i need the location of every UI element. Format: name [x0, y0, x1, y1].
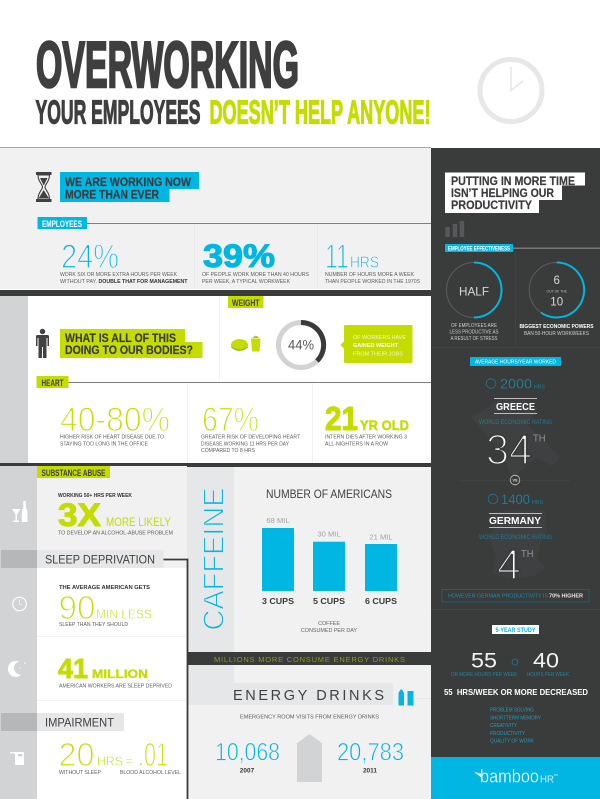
stat: germany: TH	[521, 548, 534, 560]
axis caption: CONSUMED PER DAY	[301, 628, 358, 634]
stat: 20 hrs = .01: HRS	[97, 753, 123, 768]
section tag: employees: EMPLOYEES	[42, 219, 82, 230]
bar chart: coffee cups	[262, 516, 397, 606]
stat: 55 vs 40	[451, 648, 569, 678]
stat: 3x more likely: MORE LIKELY	[106, 515, 171, 529]
icon: clock	[13, 597, 26, 611]
stat: 90 min less: THE AVERAGE AMERICAN GETS	[59, 585, 150, 591]
callout: gained weight: FROM THEIR JOBS	[353, 352, 403, 358]
panel: productivity sidebar	[431, 148, 600, 757]
icon: person	[36, 329, 49, 358]
panel: caffeine	[187, 466, 431, 653]
chart: 44% donut: 44%	[288, 336, 314, 352]
stat: 67%: GREATER RISK OF DEVELOPING HEART	[201, 434, 301, 440]
section tag: employee effectiveness: EMPLOYEE EFFECTIVENESS	[448, 246, 510, 252]
heading: DOING TO OUR BODIES?	[65, 343, 193, 357]
stat: 39%	[202, 238, 309, 285]
chart: 6 of 10 ring: 10	[550, 297, 563, 309]
section tag: substance abuse: SUBSTANCE ABUSE	[42, 468, 106, 479]
bar chart: coffee cups: 3 CUPS	[262, 596, 294, 606]
logo: bambooHR: bamboo	[480, 767, 539, 787]
icon: hourglass	[36, 172, 52, 202]
icon: burger and drink	[231, 336, 260, 352]
panel: energy drinks	[188, 665, 431, 799]
stat: germany: WORLD ECONOMIC RATING	[479, 535, 552, 541]
stat: 55 vs 40: 55	[471, 648, 497, 672]
stat: 67%: 67%	[202, 401, 259, 439]
stat: 67%: DISEASE WORKING 11 HRS PER DAY	[201, 441, 289, 447]
text: economic powers	[520, 324, 594, 337]
logo: bambooHR: HR	[540, 774, 554, 786]
stat: 90 min less	[58, 585, 152, 628]
bar chart: coffee cups: 21 MIL	[369, 533, 393, 542]
subtitle: YOUR EMPLOYEES	[36, 93, 200, 130]
connector line	[164, 560, 188, 799]
stat: 2011: 20,783	[337, 738, 404, 766]
bar chart: coffee cups: 5 CUPS	[313, 596, 345, 606]
heading	[445, 172, 585, 213]
icon: cans	[398, 690, 414, 706]
panel: substance abuse, sleep and impairment	[0, 466, 187, 799]
list: decreased skills: QUALITY OF WORK	[490, 739, 534, 745]
stat: 24%: DOUBLE THAT FOR MANAGEMENT	[98, 279, 188, 285]
icon: clock	[480, 60, 542, 122]
stat: greece: TH	[533, 433, 546, 444]
icon: versus	[510, 475, 520, 485]
section tag: heart: HEART	[42, 378, 64, 389]
stat: germany: 1400	[501, 492, 530, 507]
text: half of employees: LESS PRODUCTIVE AS	[450, 330, 499, 336]
stat: 39%: 39%	[203, 238, 275, 274]
stat: 2007: 10,068	[215, 738, 280, 766]
icon: moon and stars	[8, 661, 26, 677]
map: greece	[470, 398, 560, 478]
stat: 3x more likely: WORKING 50+ HRS PER WEEK	[58, 493, 132, 499]
heading	[60, 329, 202, 358]
stat: 67%: COMPARED TO 8 HRS	[201, 448, 255, 454]
icon: bars	[445, 221, 464, 237]
text: half of employees: A RESULT OF STRESS	[450, 336, 498, 342]
stat: 20 hrs = .01: WITHOUT SLEEP	[59, 770, 101, 776]
stat: 24%: WORK SIX OR MORE EXTRA HOURS PER WEEK	[60, 272, 177, 278]
axis caption: COFFEE	[318, 621, 340, 627]
stat: 2007: 2007	[240, 768, 255, 775]
stat: greece: HRS	[534, 384, 546, 390]
chart: 6 of 10 ring: OUT OF THE	[546, 290, 568, 294]
callout: german productivity: 70% HIGHER	[549, 594, 583, 600]
stat: germany: GERMANY	[489, 515, 541, 527]
list: decreased skills: CREATIVITY	[490, 723, 517, 729]
stat: 21 yr old: INTERN DIES AFTER WORKING 3	[325, 434, 407, 440]
axis caption	[301, 621, 358, 634]
heading: ISN’T HELPING OUR	[451, 186, 554, 200]
stat: 20 hrs = .01: 20	[58, 736, 94, 773]
caption: EMERGENCY ROOM VISITS FROM ENERGY DRINKS	[240, 715, 379, 721]
panel: logo footer	[431, 757, 600, 799]
heading: impairment	[1, 713, 124, 731]
stat: 20 hrs = .01: .01	[138, 736, 168, 773]
callout: gained weight: GAINED WEIGHT	[353, 343, 399, 349]
stat: 3x more likely: TO DEVELOP AN ALCOHOL-ABUSE PROBLEM	[58, 531, 173, 537]
text: half of employees: OF EMPLOYEES ARE	[451, 323, 498, 329]
stat: 39%: OF PEOPLE WORK MORE THAN 40 HOURS	[202, 272, 309, 278]
heading: MORE THAN EVER	[65, 188, 159, 202]
stat: 11 hrs: 11	[325, 238, 349, 276]
section tag: weight	[228, 296, 264, 309]
stat: germany: HRS	[532, 500, 544, 506]
section tag: 5-year study	[492, 625, 539, 634]
stat: 20 hrs = .01: =	[125, 753, 133, 768]
heading: sleep deprivation: SLEEP DEPRIVATION	[45, 553, 155, 567]
banner: millions more: MILLIONS MORE CONSUME ENERGY DRINKS	[214, 655, 405, 664]
heading: impairment: IMPAIRMENT	[45, 716, 115, 730]
stat: 90 min less: 90	[58, 589, 96, 626]
stat: greece: GREECE	[496, 401, 535, 413]
text: economic powers: BIGGEST ECONOMIC POWERS	[520, 324, 594, 330]
chart title: NUMBER OF AMERICANS	[266, 489, 392, 501]
stat: 20 hrs = .01: BLOOD ALCOHOL LEVEL	[120, 770, 181, 776]
stat: 67%	[201, 401, 301, 454]
heading: caffeine vertical: CAFFEINE	[198, 488, 230, 630]
section tag: employees	[38, 217, 431, 230]
stat: 11 hrs	[325, 238, 420, 285]
callout: german productivity	[442, 590, 589, 602]
stat: 24%: WITHOUT PAY.	[60, 279, 97, 285]
section tag: substance abuse	[37, 466, 110, 479]
callout: german productivity: HOWEVER GERMAN PRODUCTIVITY IS	[448, 594, 548, 600]
section tag: heart	[36, 376, 431, 389]
stat: 3x more likely	[58, 493, 173, 537]
chart: 6 of 10 ring: 6	[553, 275, 560, 287]
icon: bottle and glass	[12, 501, 28, 522]
section tag: average hours: AVERAGE HOURS/YEAR WORKED	[475, 360, 556, 366]
section tag: weight: WEIGHT	[232, 298, 260, 309]
chart: 44% donut	[278, 322, 324, 368]
text: half of employees	[450, 323, 499, 342]
stat: 41 million: MILLION	[92, 669, 148, 681]
arrow	[296, 734, 323, 782]
stat: greece: WORLD ECONOMIC RATING	[479, 420, 552, 426]
stat: 11 hrs: THAN PEOPLE WORKED IN THE 1970S	[325, 279, 420, 285]
stat: 55 vs 40: OR MORE HOURS PER WEEK	[451, 672, 517, 678]
callout: gained weight	[340, 325, 412, 363]
list: decreased skills: PROBLEM SOLVING	[490, 708, 534, 714]
title: OVERWORKING	[36, 28, 299, 101]
heading: ENERGY DRINKS	[233, 688, 384, 704]
stat: 3x more likely: 3X	[58, 497, 102, 533]
icon: breathalyzer	[10, 752, 24, 765]
logo: bambooHR: TM	[554, 774, 558, 777]
list: decreased skills	[490, 708, 541, 745]
stat: 41 million: 41	[58, 653, 88, 684]
stat: 21 yr old: 21	[325, 400, 358, 437]
heading: sleep deprivation	[1, 550, 164, 568]
heading: PUTTING IN MORE TIME	[451, 174, 575, 188]
chart: half ring: HALF	[459, 287, 489, 299]
stat: 2007	[215, 738, 280, 775]
stat: 55 vs 40: 40	[533, 648, 559, 672]
chart: half ring	[446, 262, 502, 318]
stat: 41 million: AMERICAN WORKERS ARE SLEEP DEPRIVED	[59, 684, 172, 690]
heading: WE ARE WORKING NOW	[65, 175, 191, 189]
icon: versus: VS	[512, 479, 518, 483]
panel: header	[0, 0, 600, 148]
banner: millions more	[187, 652, 431, 665]
stat: 39%: PER WEEK, A TYPICAL WORKWEEK	[202, 279, 290, 285]
section tag: average hours	[470, 357, 561, 366]
section tag: employee effectiveness	[445, 244, 600, 252]
stat: 20 hrs = .01	[58, 736, 181, 776]
panel: bodies	[0, 296, 431, 466]
heading: PRODUCTIVITY	[451, 198, 532, 212]
stat: 11 hrs: NUMBER OF HOURS MORE A WEEK	[325, 272, 414, 278]
callout: gained weight: OF WORKERS HAVE	[353, 335, 406, 341]
stat: 40-80%: STAYING TOO LONG IN THE OFFICE	[60, 441, 148, 447]
bar chart: coffee cups: 68 MIL	[266, 516, 290, 525]
bar chart: coffee cups: 30 MIL	[317, 530, 341, 539]
stat: 24%	[60, 238, 188, 285]
bar chart: coffee cups: 6 CUPS	[365, 596, 397, 606]
map: germany	[490, 510, 547, 578]
stat: 41 million	[58, 653, 172, 690]
stat: 21 yr old	[325, 400, 409, 447]
stat: greece: 2000	[500, 376, 532, 391]
text: economic powers: BAN 50-HOUR WORKWEEKS	[524, 331, 590, 337]
list: decreased skills: SHORTTERM MEMORY	[490, 715, 541, 721]
stat: 21 yr old: YR OLD	[360, 418, 409, 433]
stat: 2011: 2011	[363, 768, 377, 775]
list: decreased skills: PRODUCTIVITY	[490, 731, 525, 737]
stat: germany: 4	[497, 541, 521, 589]
stat: 90 min less: SLEEP THAN THEY SHOULD	[59, 622, 128, 628]
text: decreased: 55 HRS/WEEK OR MORE DECREASED	[444, 688, 588, 697]
panel: working more than ever	[0, 148, 431, 289]
stat: germany	[479, 492, 552, 589]
stat: 55 vs 40: HOURS PER WEEK	[527, 672, 569, 678]
stat: 11 hrs: HRS	[350, 254, 379, 271]
stat: greece: 34	[486, 426, 532, 474]
heading: WHAT IS ALL OF THIS	[65, 331, 176, 345]
stat: greece	[479, 376, 552, 474]
stat: 2011	[337, 738, 404, 775]
stat: 21 yr old: ALL-NIGHTERS IN A ROW	[325, 441, 389, 447]
chart: 6 of 10 ring	[529, 262, 584, 318]
stat: 40-80%: 40-80%	[60, 401, 170, 439]
section tag: 5-year study: 5-YEAR STUDY	[496, 628, 536, 634]
stat: 90 min less: MIN LESS	[96, 606, 152, 621]
heading	[60, 172, 199, 202]
stat: 40-80%: HIGHER RISK OF HEART DISEASE DUE TO	[60, 434, 164, 440]
stat: 24%: 24%	[61, 238, 119, 276]
